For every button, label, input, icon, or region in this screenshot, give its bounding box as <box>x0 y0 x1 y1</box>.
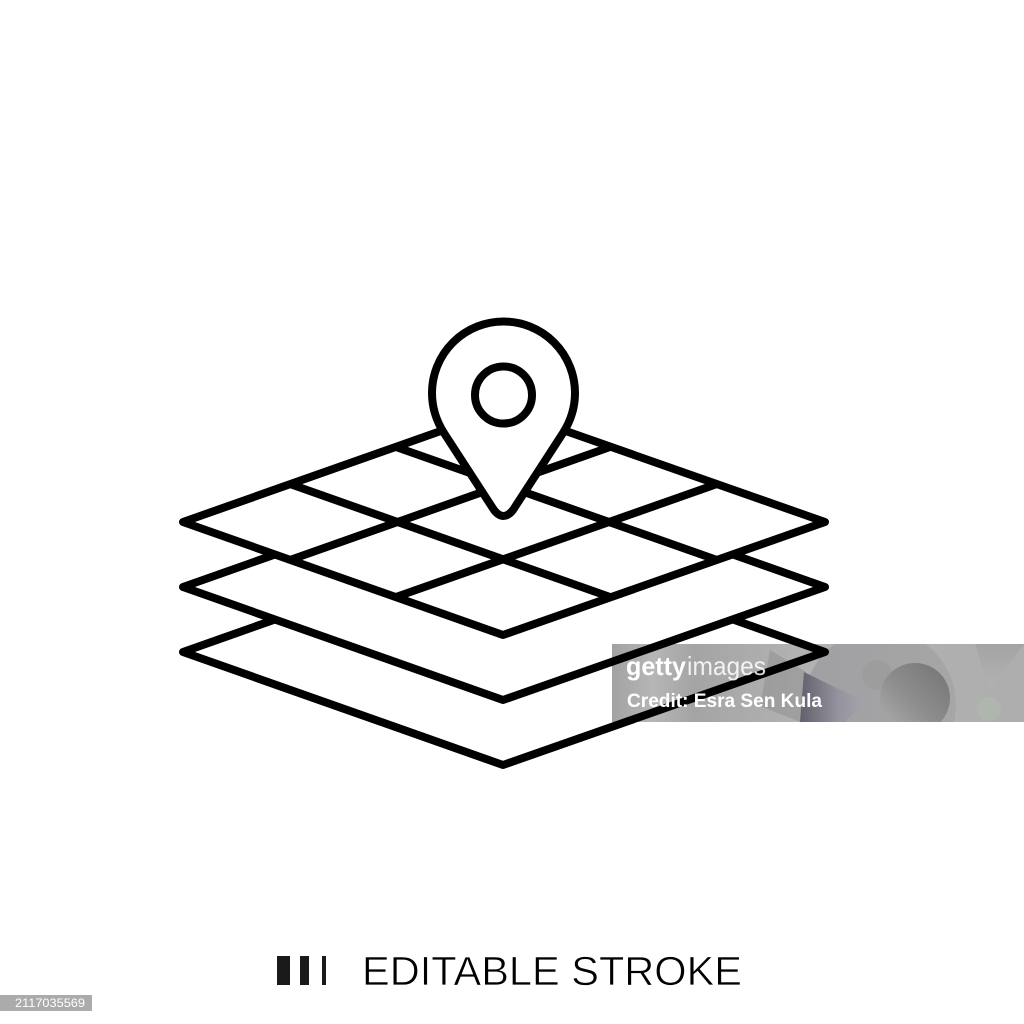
watermark credit: Credit: Esra Sen Kula <box>627 691 822 712</box>
icon: location pin <box>432 322 575 516</box>
image id tag <box>0 995 92 1011</box>
top map layer with grid <box>183 409 825 635</box>
watermark text <box>626 651 822 712</box>
watermark logo: images: images <box>687 651 766 681</box>
editable stroke label: EDITABLE STROKE <box>362 948 742 994</box>
image id tag: 2117035569 <box>15 996 85 1010</box>
bottom map layer <box>183 620 825 765</box>
middle map layer <box>183 554 825 700</box>
watermark background panel <box>612 644 1024 722</box>
watermark logo: getty: getty <box>626 651 687 681</box>
map layers icon <box>183 409 825 765</box>
icon: editable stroke bars <box>277 956 326 985</box>
infographic canvas <box>0 318 1024 1011</box>
